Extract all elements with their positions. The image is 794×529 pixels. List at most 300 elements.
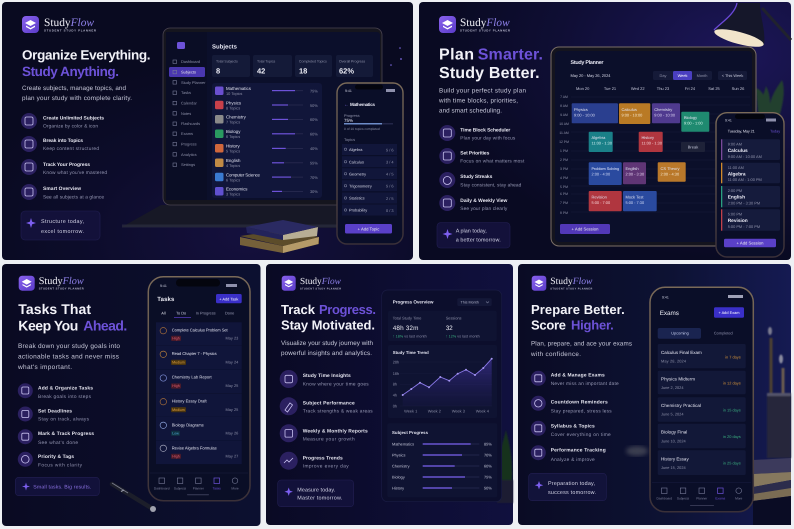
stat cards: 42 — [257, 66, 265, 76]
exam: history: History Essay — [661, 456, 689, 461]
session: Algebra — [721, 163, 780, 183]
bottom navigation: Subjects — [677, 497, 690, 501]
topic rows: Algebra — [349, 147, 363, 152]
tablet header — [570, 60, 747, 80]
dashboard header — [393, 298, 492, 306]
summary stats: 32 — [446, 325, 453, 332]
topic rows: 2 / 5 — [386, 196, 394, 201]
description: Create subjects, manage topics, and — [22, 85, 126, 92]
progress dashboard — [382, 290, 502, 502]
exam: chemistry — [658, 397, 746, 422]
feature: performance — [280, 397, 373, 415]
heading — [531, 302, 625, 333]
progress summary: 75% — [344, 118, 353, 123]
task: algebra: May 27 — [226, 454, 238, 458]
callout: Structure today, — [41, 219, 84, 225]
line chart: study time trend: Study Time Trend — [393, 350, 429, 355]
summary stats: 48h 32m — [393, 325, 418, 332]
feature: unlimited subjects — [21, 113, 104, 130]
logo: StudyFlow: STUDENT STUDY PLANNER — [300, 287, 341, 290]
description: plan your study with complete clarity. — [22, 95, 132, 102]
line chart: study time trend: 0h — [393, 403, 397, 408]
blurred object — [626, 446, 648, 456]
logo: StudyFlow: StudyFlow — [39, 276, 84, 287]
session: Calculus — [721, 139, 780, 160]
feature: add tasks — [18, 383, 93, 400]
feature: countdown — [531, 396, 612, 414]
feature: topics — [21, 136, 99, 152]
logo: StudyFlow: STUDENT STUDY PLANNER — [44, 29, 97, 33]
tabs — [658, 328, 733, 339]
feature: weekly view: See your plan clearly — [460, 206, 508, 212]
Computer Science: Computer Science — [226, 172, 261, 177]
callout — [15, 477, 99, 496]
add topic button: + Add Topic — [358, 226, 379, 231]
feature: deadlines — [18, 406, 90, 423]
Mathematics — [215, 86, 318, 96]
description: powerful insights and analytics. — [281, 350, 372, 357]
day headers: Fri 24 — [685, 86, 696, 91]
logo: StudyFlow — [532, 276, 593, 291]
callout: Preparation today, — [548, 481, 596, 487]
task: chemistry: Chemistry Lab Report — [172, 375, 213, 380]
phone: exams: 9:41 — [662, 295, 669, 299]
bars: subject progress: 50% — [484, 486, 492, 490]
session: Calculus: Calculus — [728, 148, 748, 154]
summary stats — [388, 311, 497, 341]
exam: calculus: in 7 days — [725, 355, 741, 360]
day headers: Tue 21 — [604, 86, 617, 91]
dashboard header: This Month — [460, 300, 479, 304]
exams header: + Add Exam — [718, 310, 740, 315]
Calculus: 9:00 - 10:00 — [622, 112, 643, 118]
bottom navigation: Dashboard — [657, 497, 672, 501]
exam: biology — [658, 424, 746, 448]
CS Theory — [658, 162, 686, 182]
Physics — [572, 103, 618, 123]
description: actionable tasks and never miss — [18, 353, 120, 360]
Algebra: Algebra — [592, 135, 606, 140]
phone: exams — [650, 287, 753, 512]
bars: subject progress: Biology — [392, 474, 405, 480]
panel: subjects — [2, 2, 413, 260]
Computer Science: 70% — [310, 175, 318, 180]
exam: chemistry: Chemistry Practical — [661, 403, 701, 408]
session: Revision: 5:00 PM - 7:00 PM — [728, 224, 760, 229]
History — [639, 132, 663, 152]
session: Algebra: Algebra — [728, 171, 746, 177]
Revision: Revision — [592, 194, 607, 200]
stars — [390, 47, 402, 66]
phone: tasks: 9:41 — [160, 284, 167, 288]
laptop sidebar: Progress — [181, 142, 197, 146]
phone: mathematics: Mathematics — [350, 102, 375, 107]
Biology: Biology — [684, 115, 697, 120]
feature: insights: Study Time Insights — [303, 373, 351, 379]
laptop sidebar: Subjects — [181, 70, 196, 74]
feature: time block: Time Block Scheduler — [460, 127, 510, 133]
exam: biology: Biology Final — [661, 430, 687, 435]
exam: calculus: May 28, 2024 — [661, 359, 687, 364]
Economics: Economics — [226, 187, 248, 192]
heading: Plan — [439, 46, 474, 63]
tabs: Upcoming — [671, 331, 689, 336]
add session button: + Add Session — [737, 241, 764, 246]
feature: time block: Plan your day with focus — [460, 135, 516, 141]
line chart: study time trend: 16h — [393, 371, 399, 376]
topic rows: Geometry — [349, 171, 366, 176]
callout — [278, 480, 354, 507]
logo: StudyFlow: StudyFlow — [460, 17, 510, 29]
logo: StudyFlow — [19, 276, 84, 291]
logo: StudyFlow: STUDENT STUDY PLANNER — [39, 288, 84, 291]
session: English: 2:00 PM - 3:30 PM — [728, 200, 760, 206]
feature: performance: Track strengths & weak areas — [303, 409, 373, 415]
description: Break down your study goals into — [18, 343, 120, 350]
stat cards: Overall Progress — [339, 60, 365, 64]
session: Revision: Revision — [728, 218, 748, 224]
feature: mark progress: Mark & Track Progress — [38, 431, 94, 437]
Algebra — [589, 132, 613, 152]
feature: topics: Break into Topics — [43, 138, 83, 144]
line chart: study time trend: Week 2 — [428, 408, 441, 413]
heading: Study Anything. — [22, 64, 119, 79]
description: what's important. — [17, 364, 72, 371]
exam: chemistry: June 5, 2024 — [661, 412, 684, 417]
time labels: 6 PM — [560, 192, 568, 196]
Mock Test: Mock Test — [626, 194, 644, 200]
callout — [529, 473, 606, 501]
feature: add tasks: Break goals into steps — [38, 394, 92, 400]
stat cards: 62% — [339, 66, 354, 76]
exams header: Exams — [660, 310, 679, 317]
time labels: 1 PM — [560, 149, 568, 153]
English: 55% — [310, 161, 318, 166]
task: history: History Essay Draft — [172, 399, 208, 404]
add session button — [724, 239, 776, 247]
callout — [437, 223, 510, 248]
logo: StudyFlow: STUDENT STUDY PLANNER — [550, 287, 592, 290]
tablet header: Week — [678, 73, 687, 78]
description — [22, 85, 132, 102]
tablet header: Month — [697, 73, 707, 78]
exam: physics — [658, 371, 746, 394]
task: algebra — [160, 445, 238, 459]
session: Calculus: 9:00 AM — [728, 142, 742, 146]
heading — [18, 301, 127, 334]
callout: success tomorrow. — [548, 490, 596, 496]
task: history: Medium — [172, 408, 185, 412]
line chart: study time trend: 8h — [393, 382, 397, 387]
feature: overview: See all subjects at a glance — [43, 194, 104, 200]
pen — [112, 483, 156, 512]
topic rows: Probability — [349, 208, 367, 213]
feature: reports: Weekly & Monthly Reports — [303, 428, 368, 434]
task: calculus: May 23 — [226, 336, 238, 341]
time labels: 11 AM — [559, 131, 569, 135]
phone: tasks — [148, 277, 250, 501]
History — [215, 144, 318, 154]
Calculus — [619, 103, 650, 124]
time labels: 7 AM — [560, 95, 568, 99]
tabs: In Progress — [196, 310, 216, 315]
session: English: 2:00 PM — [728, 188, 742, 193]
laptop title: Subjects — [212, 44, 238, 51]
feature: insights: Know where your time goes — [303, 381, 369, 387]
feature: priority: Focus with clarity — [38, 462, 83, 468]
phone: daily schedule: Today — [770, 130, 780, 134]
feature: overview — [21, 184, 104, 200]
Chemistry: 9:00 - 10:00 — [654, 112, 676, 118]
feature: manage exams: Add & Manage Exams — [551, 373, 605, 379]
task: algebra: High — [172, 454, 180, 458]
feature: priorities: Set Priorities — [460, 151, 490, 157]
Biology: 9:00 - 1:00 — [684, 120, 703, 126]
exam: physics: Physics Midterm — [661, 377, 695, 382]
stat cards — [212, 55, 373, 77]
session: Revision: 5:00 PM — [728, 212, 742, 216]
description: Plan, prepare, and ace your exams — [531, 341, 632, 348]
plant — [756, 80, 784, 116]
Biology: Biology — [226, 129, 241, 134]
add session button: + Add Session — [572, 226, 599, 232]
English: 4 Topics — [226, 163, 240, 168]
phone: daily schedule — [716, 113, 784, 257]
heading: Progress. — [319, 302, 376, 317]
task: chemistry: May 25 — [226, 383, 238, 388]
Chemistry — [215, 115, 318, 125]
panel: planner — [419, 2, 791, 260]
summary stats: Sessions — [446, 316, 462, 321]
feature: unlimited subjects: Create Unlimited Subjects — [43, 116, 104, 122]
heading — [22, 48, 150, 79]
History: 40% — [310, 146, 318, 151]
topic rows: Calculus — [349, 159, 364, 164]
line chart: study time trend: Week 3 — [452, 408, 465, 413]
stat cards: 18 — [299, 66, 307, 76]
CS Theory: 2:00 - 4:30 — [660, 172, 680, 176]
topic rows: 5 / 6 — [386, 184, 394, 189]
task: physics: May 24 — [226, 360, 239, 365]
task: biology — [160, 422, 238, 436]
tabs: To Do — [176, 310, 186, 315]
tasks header: Tasks — [157, 296, 175, 303]
bars: subject progress: History — [392, 486, 404, 490]
History: History — [226, 144, 240, 149]
heading: Ahead. — [83, 318, 127, 334]
phone: mathematics — [337, 83, 403, 244]
laptop sidebar: Calendar — [181, 100, 197, 106]
summary stats: Total Study Time — [393, 316, 421, 321]
logo: StudyFlow: StudyFlow — [44, 17, 94, 29]
task: physics: Read Chapter 7 - Physics — [172, 351, 217, 356]
session: Algebra: 11:00 AM — [728, 165, 744, 170]
phone: daily schedule: Tuesday, May 21 — [728, 130, 755, 134]
Computer Science — [215, 172, 318, 182]
callout: Small tasks. Big results. — [33, 484, 91, 490]
day headers: Thu 23 — [657, 86, 670, 91]
callout: excel tomorrow. — [41, 229, 84, 235]
feature: deadlines: Set Deadlines — [38, 408, 72, 414]
Problem Solving: Problem Solving — [592, 167, 619, 171]
exam: history: June 15, 2024 — [661, 465, 686, 470]
topic rows: 5 / 6 — [386, 147, 394, 152]
feature: reports — [280, 424, 368, 443]
Chemistry: Chemistry — [654, 107, 672, 112]
feature: performance: Performance Tracking — [551, 448, 606, 454]
heading: Study Better. — [439, 65, 540, 82]
description: Build your perfect study plan — [439, 88, 526, 95]
lamp — [713, 3, 791, 50]
heading — [281, 302, 376, 333]
topic rows — [342, 144, 397, 216]
Biology — [215, 129, 318, 139]
bars: subject progress: Subject Progress — [392, 430, 429, 435]
summary stats: ↑ 18% vs last month — [393, 334, 427, 338]
feature: unlimited subjects: Organize by color & icon — [43, 124, 98, 130]
bars: subject progress: 70% — [484, 452, 492, 458]
exam: calculus — [658, 344, 746, 368]
heading: Higher. — [571, 318, 614, 333]
feature: countdown: Stay prepared, stress less — [551, 408, 612, 414]
time labels: 7 PM — [560, 201, 568, 205]
Mock Test: 5:00 - 7:30 — [626, 200, 645, 205]
exam: chemistry: in 15 days — [723, 407, 741, 412]
add topic button — [345, 224, 392, 234]
time labels: 10 AM — [559, 122, 569, 126]
Biology — [681, 112, 709, 132]
day headers: Mon 20 — [576, 86, 590, 91]
laptop sidebar — [166, 32, 207, 200]
laptop sidebar: Analytics — [181, 152, 197, 157]
feature: mark progress — [18, 429, 94, 446]
logo: StudyFlow: StudyFlow — [550, 276, 593, 287]
bottom navigation: Tasks — [213, 487, 221, 491]
Physics: Physics — [226, 100, 242, 105]
tablet — [551, 47, 756, 246]
heading: Smarter. — [478, 46, 543, 63]
Break: Break — [688, 144, 698, 150]
exam: biology: June 10, 2024 — [661, 438, 686, 443]
tablet header: Study Planner — [570, 60, 604, 66]
feature: streaks: Stay consistent, stay ahead — [460, 182, 522, 188]
dashboard header: Progress Overview — [393, 299, 434, 304]
feature: syllabus: Syllabus & Topics — [551, 423, 595, 429]
panel: tasks — [2, 264, 260, 526]
Mathematics: 10 Topics — [226, 91, 242, 96]
bottom navigation — [652, 483, 751, 506]
heading: Stay Motivated. — [281, 318, 375, 333]
time labels: 3 PM — [560, 167, 568, 171]
feature: deadlines: Stay on track, always — [38, 417, 90, 423]
feature: streaks: Study Streaks — [460, 174, 493, 180]
logo: StudyFlow — [282, 276, 342, 291]
bottom navigation: Subjects — [174, 487, 187, 491]
description — [17, 343, 120, 371]
logo: StudyFlow: StudyFlow — [300, 277, 342, 287]
Algebra: 11:00 - 1:30 — [592, 140, 613, 146]
tabs: Done — [225, 310, 234, 315]
feature: manage exams: Never miss an important date — [551, 381, 619, 387]
phone: mathematics: ← — [344, 102, 349, 108]
heading: Keep You — [18, 318, 78, 334]
exam: biology: in 20 days — [723, 434, 741, 439]
tabs — [161, 310, 234, 318]
task: chemistry: High — [172, 384, 180, 388]
line chart: study time trend: 4h — [393, 392, 397, 397]
description: with time blocks, priorities, — [438, 98, 518, 105]
bars: subject progress: 85% — [484, 442, 492, 446]
CS Theory: CS Theory — [660, 166, 680, 171]
bottom navigation: More — [231, 487, 239, 491]
books — [240, 220, 319, 253]
bars: subject progress: Mathematics — [392, 442, 414, 446]
task: calculus: High — [172, 337, 180, 341]
Calculus: Calculus — [622, 107, 637, 112]
time labels: 8 AM — [560, 104, 568, 108]
subject list — [212, 83, 322, 198]
stat cards: Completed Topics — [299, 60, 327, 64]
feature: priority — [18, 452, 83, 468]
laptop sidebar: Flashcards — [181, 121, 200, 126]
feature: weekly view — [439, 195, 508, 212]
Chemistry: 7 Topics — [226, 120, 240, 125]
Physics: 9:00 - 10:00 — [574, 112, 596, 118]
History: 11:00 - 1:30 — [642, 140, 663, 146]
heading — [439, 46, 543, 82]
bottom navigation: Dashboard — [154, 487, 170, 491]
callout: A plan today, — [456, 229, 487, 235]
line chart: study time trend — [388, 345, 497, 418]
feature: trends — [280, 452, 349, 470]
time labels: 4 PM — [560, 176, 568, 180]
feature: syllabus: Cover everything on time — [551, 432, 611, 438]
Revision: 5:00 - 7:00 — [592, 200, 611, 205]
feature: streaks — [439, 172, 522, 188]
bottom navigation — [150, 473, 248, 495]
Revision — [589, 191, 622, 211]
bars: subject progress: 75% — [484, 474, 492, 480]
exam: history: in 25 days — [723, 460, 741, 465]
feature: reports: Measure your growth — [303, 437, 355, 443]
History: 5 Topics — [226, 149, 240, 154]
description — [530, 341, 632, 358]
bottom navigation: Planner — [193, 487, 205, 491]
Physics: 50% — [310, 103, 318, 108]
feature: weekly view: Daily & Weekly View — [460, 198, 507, 204]
feature: overview: Smart Overview — [43, 186, 81, 192]
tablet header: < This Week — [722, 73, 743, 78]
heading: Track — [281, 302, 316, 317]
task: biology: Low — [172, 432, 179, 436]
exam: calculus: Calculus Final Exam — [661, 350, 702, 355]
logo: StudyFlow: STUDENT STUDY PLANNER — [460, 29, 511, 33]
feature: countdown: Countdown Reminders — [551, 399, 608, 405]
Problem Solving: 2:00 - 4:00 — [592, 172, 611, 176]
description — [438, 88, 526, 115]
description — [281, 340, 373, 357]
laptop sidebar: Tasks — [181, 90, 191, 95]
feature: manage exams — [531, 371, 619, 387]
panel: progress — [266, 264, 513, 525]
plant — [497, 430, 513, 503]
English: English — [626, 166, 639, 171]
bottom navigation: Planner — [696, 497, 708, 501]
exam: history — [658, 450, 746, 475]
session: English — [721, 186, 780, 207]
task: calculus: Complete Calculus Problem Set — [172, 327, 229, 332]
Chemistry: 60% — [310, 117, 318, 122]
